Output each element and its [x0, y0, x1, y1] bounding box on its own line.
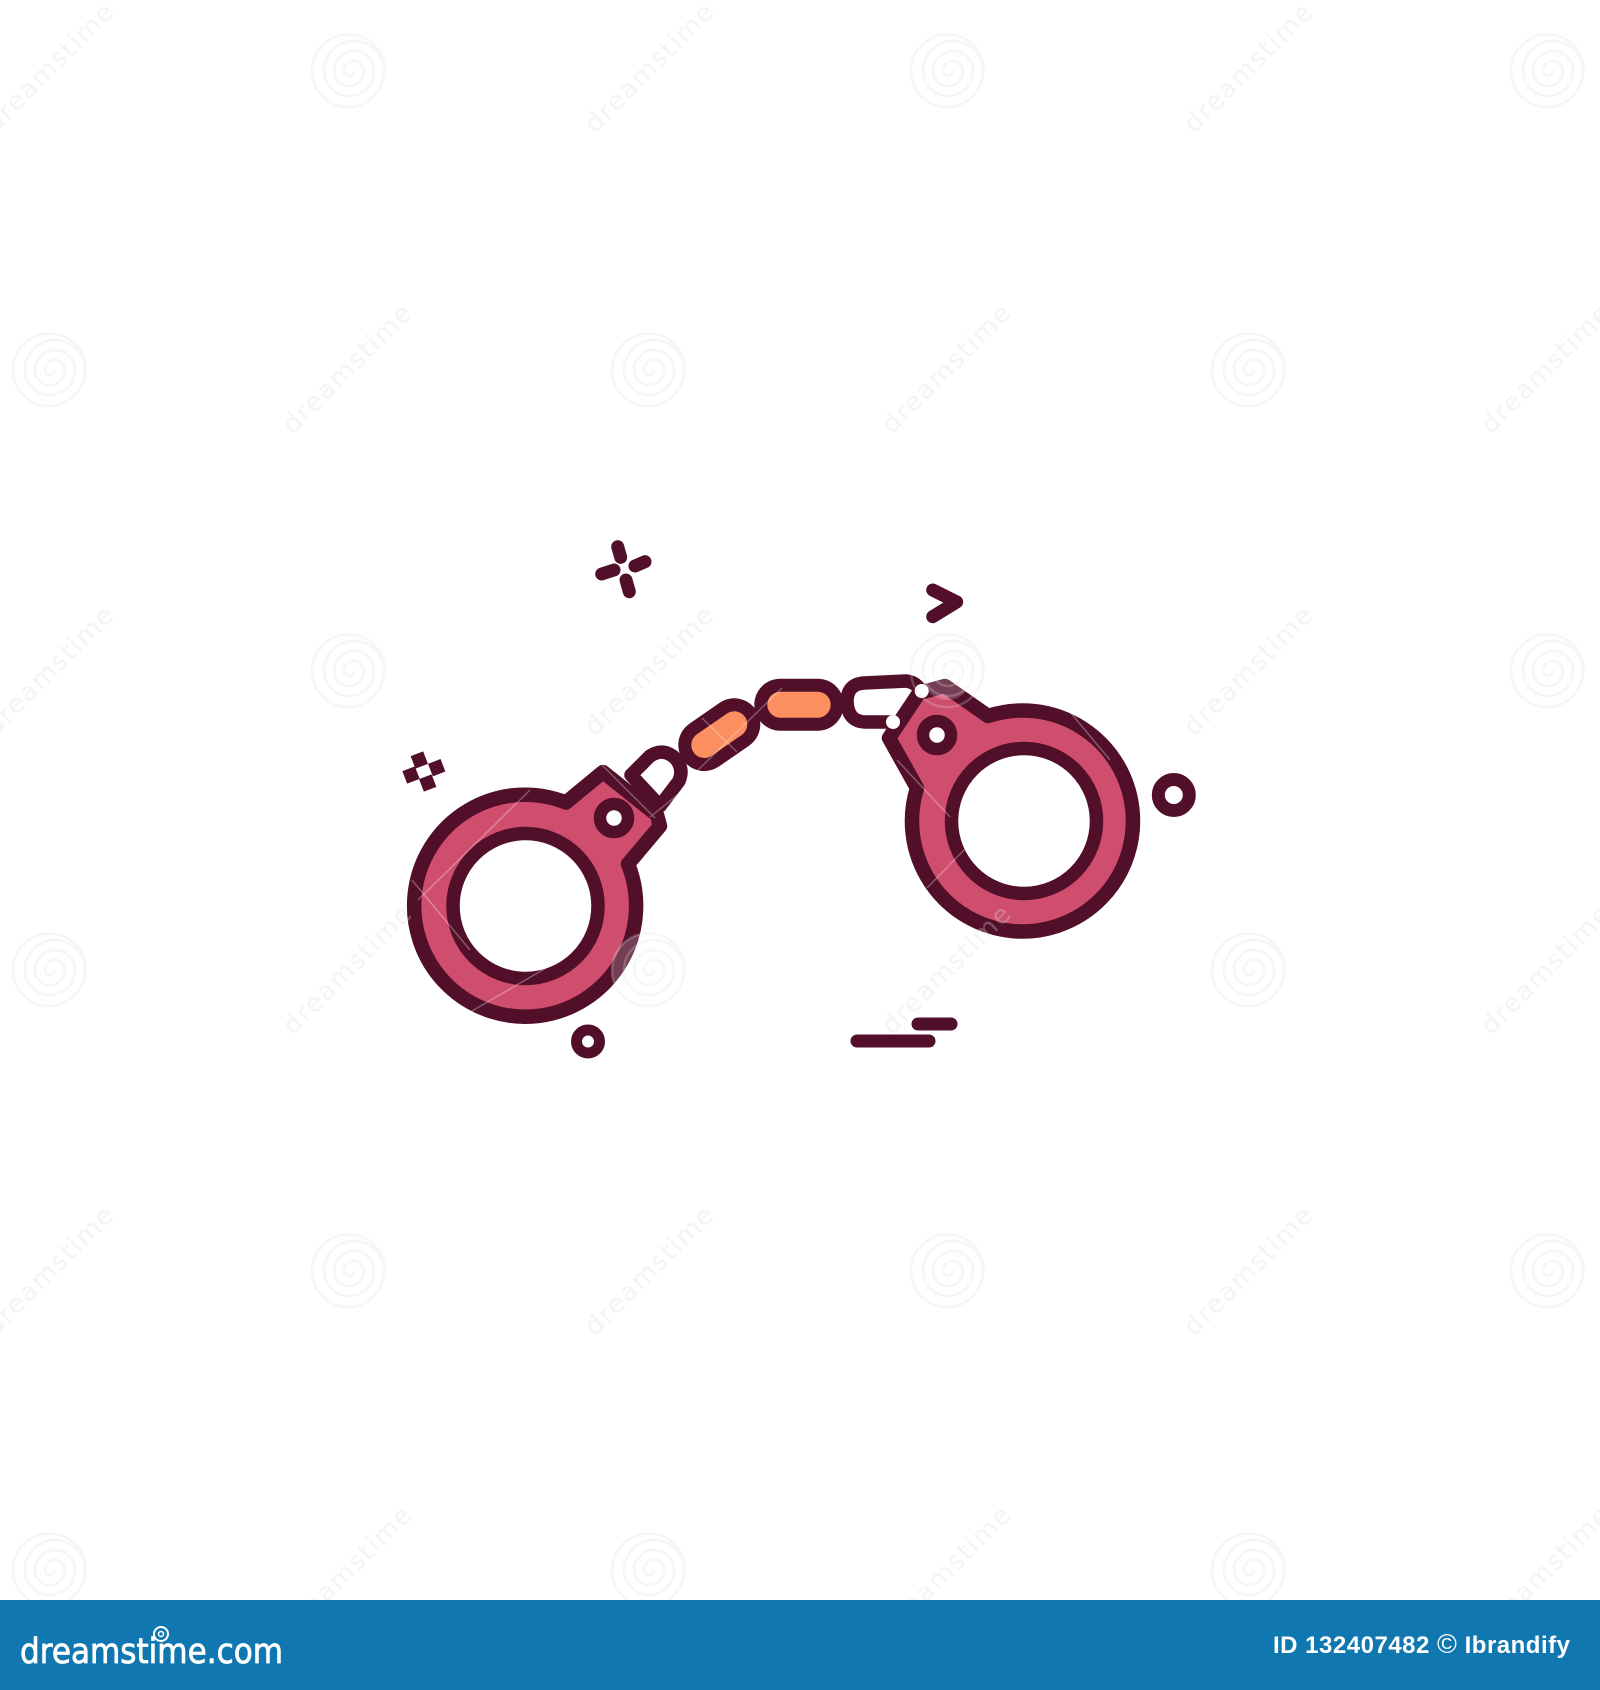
right cuff: [889, 686, 1133, 931]
watermark text: dreamstime: [876, 900, 1017, 1041]
chain link: white left link: [631, 752, 681, 806]
watermark text: dreamstime: [277, 900, 418, 1041]
decoration: dashes: [857, 1024, 951, 1041]
watermark discs on icon: [612, 650, 972, 1007]
logo spiral: [154, 1627, 168, 1641]
chain link: orange diagonal link: [704, 724, 734, 745]
decoration: four-petal sparkle: [602, 547, 645, 592]
watermark text: dreamstime: [1178, 601, 1319, 742]
watermark cross lines on icon: [412, 688, 1110, 1015]
watermark text: dreamstime: [1178, 1201, 1319, 1342]
watermark text: dreamstime: [579, 601, 720, 742]
decoration: bottom ring: [576, 1030, 600, 1053]
handcuffs icon: [414, 681, 1133, 1017]
watermark text: dreamstime: [876, 299, 1017, 440]
decoration: checker squares: [402, 751, 445, 792]
watermark text: dreamstime: [1178, 0, 1319, 139]
watermark text: dreamstime: [579, 1201, 720, 1342]
chain link: white right link: [847, 681, 921, 722]
footer credit: image id and author: ID 132407482 © Ibrandify: [1273, 1629, 1571, 1659]
chain link: orange horizontal link: [780, 679, 818, 731]
footer logo: dreamstime.com: dreamstime.com: [20, 1632, 283, 1672]
decoration: right ring: [1158, 780, 1189, 810]
footer bar: [0, 1600, 1600, 1690]
link gap dots: [886, 684, 929, 729]
watermark text: dreamstime: [876, 1501, 1017, 1642]
watermark text: dreamstime: [277, 1501, 418, 1642]
watermark text: dreamstime: [579, 0, 720, 139]
decoration: chevron: [933, 590, 957, 617]
watermark text: dreamstime: [277, 299, 418, 440]
left cuff: [414, 772, 660, 1017]
